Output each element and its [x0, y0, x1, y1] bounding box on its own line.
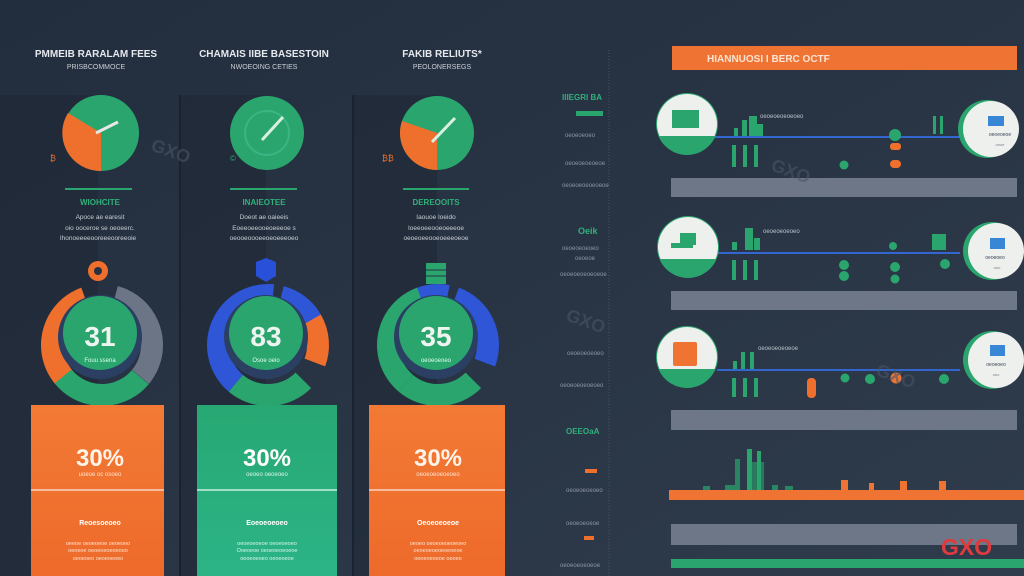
gauge 2: Osoe oeio: [252, 358, 280, 364]
heading 3: FAKIB RELIUTS*: [402, 49, 482, 60]
side legend column: IIIEGRI BA: [562, 93, 602, 102]
text block 1: oio ooceroe se oeoeerc.: [65, 225, 135, 232]
panel: column 2: [197, 49, 339, 576]
text block 1: WIOHCITE: [80, 198, 121, 207]
chart row 3: oeoeoeoeoeoe: [758, 346, 799, 352]
chart row 1: [656, 93, 1019, 170]
pie chart 2: [230, 96, 304, 170]
stat box 3: [369, 405, 505, 576]
side legend column: oeoeoeoeoeoeo: [560, 383, 604, 389]
pie chart 3: [400, 96, 474, 170]
side legend column: oeoeoeoeoeo: [567, 351, 604, 357]
stat box 3: 30%: [414, 445, 462, 472]
chart row 2: oeoeoeo: [985, 255, 1005, 261]
panel: column 2: NWOEOING CETIES: [231, 64, 298, 71]
banner: right title: [672, 46, 1017, 70]
chart row 1: oeoe: [996, 142, 1005, 147]
panel: column 2: ©: [230, 154, 236, 163]
gauge 3: 35: [420, 321, 452, 352]
chart row 2: oeoeoeoeoeo: [763, 229, 800, 235]
panel: column 3: PEOLONERSEGS: [413, 64, 472, 71]
gauge 2: 83: [250, 321, 282, 352]
text: GXO: [769, 155, 813, 187]
side legend column: oeoeoeoeoeoeoe: [560, 272, 607, 278]
side legend column: oeoeoeoeoeoeoe: [562, 183, 609, 189]
stat box 2: 30%: [243, 445, 291, 472]
side legend column: oeoeoeoeoe: [566, 521, 600, 527]
stat box 2: Eoeoeoeoeo: [246, 520, 288, 527]
panel: column 1: [31, 49, 172, 576]
chart row 3: [656, 326, 1024, 398]
stat box 3: Oeoeoeoeoe: [417, 520, 459, 527]
stat box 1: oeoeoe oeoeoeoeoeoeo: [68, 548, 128, 554]
text block 3: DEREOOITS: [412, 198, 460, 207]
gauge 1: 31: [84, 321, 116, 352]
text block 1: Ihonoeeeeooreeeooreeoie: [60, 235, 137, 242]
panel: column 1: PRISBCOMMOCE: [67, 64, 125, 71]
side legend column: Oeik: [578, 226, 599, 236]
text block 1: [60, 198, 137, 242]
side legend column: oeoeoeoeo: [565, 133, 596, 139]
text block 3: oeoeoeeooeoeeeoeoe: [403, 235, 469, 242]
side legend column: OEEOaA: [566, 427, 600, 436]
gauge 1: [32, 275, 172, 415]
stat box 1: [31, 405, 164, 576]
text block 3: Ioeeoeeooeoeeeoe: [408, 225, 464, 232]
side legend column: oeoeoeoeoeoe: [560, 563, 601, 569]
text block 2: Doeot ae oaieeis: [240, 214, 289, 221]
side legend column: oeoeoeoeoeo: [562, 246, 599, 252]
side legend column: oeoeoeoeoeo: [566, 488, 603, 494]
watermark logo: GXO: [941, 534, 992, 560]
gauge 3: oeoeoeoeo: [421, 358, 452, 364]
chart row 3: oeo: [993, 372, 1000, 377]
gauge 2: [197, 274, 339, 416]
side legend column: oeoeoeoeoeoe: [565, 161, 606, 167]
text block 3: Iaouoe Ioeido: [416, 214, 456, 221]
icon 3: [426, 263, 446, 284]
stat box 2: [197, 405, 337, 576]
stat box 1: oeoeoeo oeoeoeoeo: [73, 556, 123, 562]
heading 1: PMMEIB RARALAM FEES: [35, 49, 157, 60]
stat box 1: uoeoe oc osoeo: [79, 472, 122, 478]
stat box 2: oeoeo oeoeoeo: [246, 472, 289, 478]
chart row 2: [657, 216, 1024, 284]
pie chart 1: [62, 95, 139, 171]
stat box 2: oeoeoeoeoe oeoeoeoeo: [237, 541, 297, 547]
stat box 3: oeoeoeoeoe oeoeo: [414, 556, 462, 562]
text: GXO: [874, 360, 918, 392]
panel: column 1: ₿: [50, 154, 56, 163]
text block 3: [403, 198, 469, 242]
text block 1: Apoce ae earesit: [76, 214, 125, 221]
panel: column 3: [367, 49, 509, 576]
bar chart: bottom: [669, 449, 1024, 500]
text block 2: INAIEOTEE: [242, 198, 286, 207]
side legend column: oeoeoe: [575, 256, 596, 262]
text block 2: Eoeeoeeooeoeeeoe s: [232, 225, 297, 232]
stat box 1: oeeoe oeoeoeoe oeoeoeo: [66, 541, 130, 547]
stat box 1: 30%: [76, 445, 124, 472]
stat box 2: Ooeoeoe oeoeoeoeoeoe: [237, 548, 297, 554]
stat box 2: oeoeoeoeo oeoeoeoe: [240, 556, 294, 562]
text block 2: [230, 198, 299, 242]
chart row 2: oeo: [994, 265, 1001, 270]
icon 2: [256, 258, 276, 282]
stat box 3: oeoeoeoeoeoeo: [416, 472, 460, 478]
text block 2: oeooeoooeeoeoeeeoeo: [230, 235, 299, 242]
chart row 1: oeoeoeoe: [989, 132, 1011, 138]
icon 1: [88, 261, 108, 281]
stat box 3: oeoeoeoeoeoeoeoe: [414, 548, 462, 554]
text: GXO: [564, 305, 608, 337]
heading 2: CHAMAIS IIBE BASESTOIN: [199, 49, 329, 60]
banner: right title: HIANNUOSI I BERC OCTF: [707, 54, 830, 65]
side legend column: [560, 50, 609, 576]
stat box 3: oeoeo oeoeoeoeoeoeo: [410, 541, 466, 547]
text: GXO: [149, 135, 193, 167]
chart row 3: oeoeoeo: [986, 362, 1006, 368]
panel: column 3: ₿₿: [382, 154, 394, 163]
chart row 1: oeoeoeoeoeoeo: [760, 114, 804, 120]
stat box 1: Reoesoeoeo: [79, 520, 121, 527]
column shading strips: [0, 95, 98, 576]
gauge 3: [367, 274, 509, 416]
gauge 1: Fouu ssena: [84, 358, 116, 364]
